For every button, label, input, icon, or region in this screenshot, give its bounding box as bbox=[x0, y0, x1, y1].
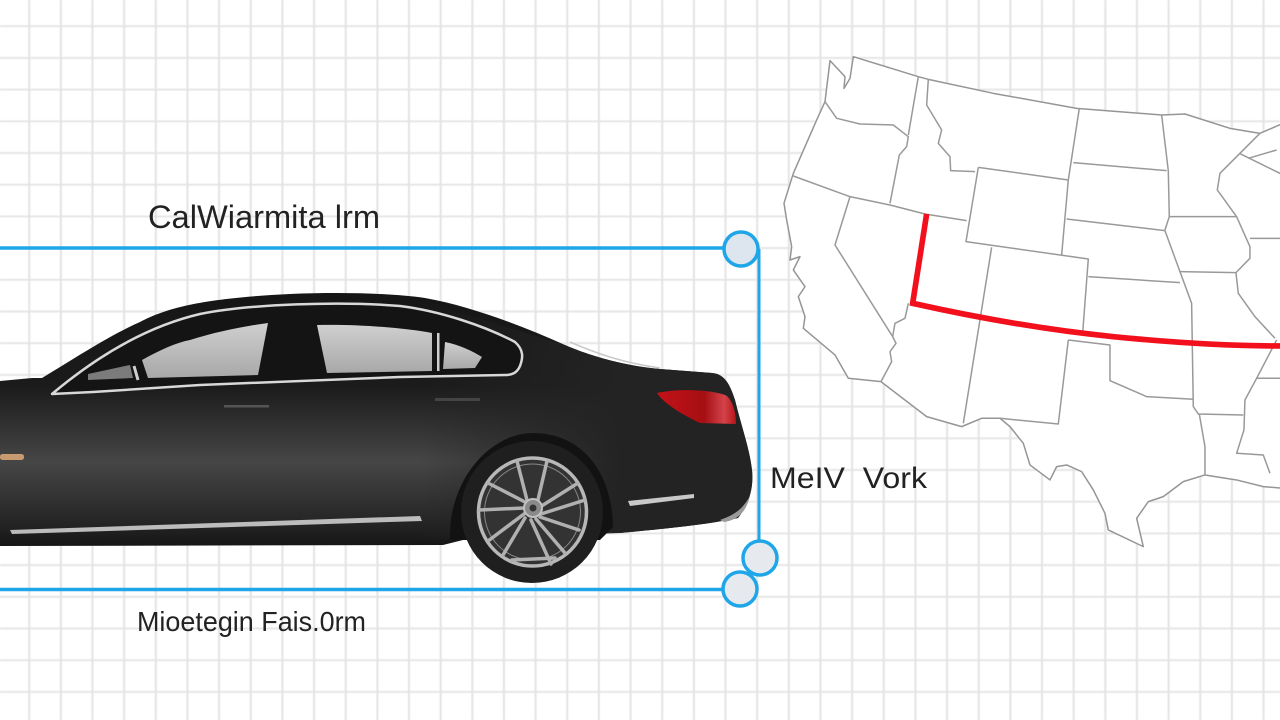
handle: bottom right bbox=[723, 572, 757, 606]
wheel arch bbox=[450, 433, 613, 540]
rim bbox=[478, 458, 586, 566]
car body bbox=[0, 293, 752, 546]
bottom label: Mioetegin Fais.0rm bbox=[137, 606, 366, 637]
top label: CalWiarmita lrm bbox=[148, 199, 380, 235]
right label: MeIV Vork bbox=[770, 462, 928, 495]
rear chrome strip bbox=[628, 494, 694, 506]
state borders bbox=[793, 77, 1280, 475]
handle: lower right bbox=[743, 541, 777, 575]
rear wheel bbox=[461, 441, 603, 583]
car side view bbox=[0, 293, 752, 583]
rear door window bbox=[317, 325, 432, 373]
roof highlight bbox=[570, 342, 660, 368]
rear bumper reflector bbox=[720, 496, 750, 522]
rear door handle bbox=[435, 398, 480, 401]
window pillar bbox=[437, 333, 440, 371]
map of the United States with route bbox=[784, 57, 1280, 547]
bottom dimension line bbox=[0, 588, 725, 591]
rear body shading bbox=[420, 300, 752, 540]
route line bbox=[913, 214, 1280, 346]
quarter window bbox=[443, 342, 482, 369]
chrome window trim bbox=[52, 304, 522, 394]
amber side marker bbox=[0, 454, 24, 460]
blue dimension frame bbox=[0, 232, 777, 606]
lower chrome strip bbox=[10, 516, 422, 534]
tyre bbox=[461, 441, 603, 583]
mirror arm bbox=[134, 366, 138, 380]
hub bbox=[524, 499, 542, 517]
handle: top right bbox=[724, 232, 758, 266]
spokes bbox=[479, 461, 585, 564]
map outline bbox=[784, 57, 1280, 547]
tail light bbox=[657, 390, 736, 424]
front door handle bbox=[224, 405, 269, 408]
right dimension line bbox=[758, 249, 760, 545]
top dimension line bbox=[0, 246, 725, 250]
side mirror bbox=[88, 365, 133, 380]
front door window bbox=[142, 323, 268, 378]
